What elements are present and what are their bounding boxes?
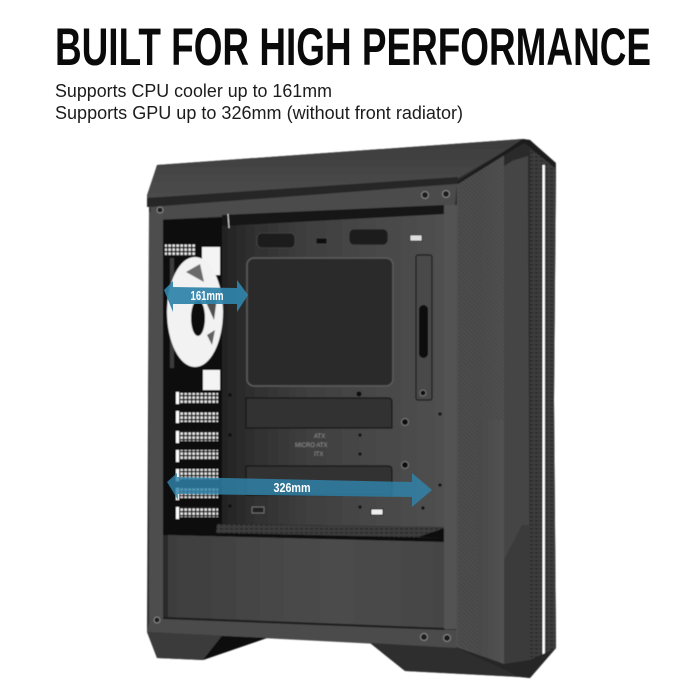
- front inner panel: [504, 156, 530, 665]
- white cable: [228, 214, 229, 228]
- top panel: [147, 139, 523, 198]
- PC case: [147, 139, 556, 678]
- case screws: [154, 190, 450, 642]
- label 326mm: 326mm: [274, 480, 310, 495]
- top frame rail: [150, 184, 457, 220]
- tray labels: ATX: [314, 434, 325, 440]
- label 161mm: 161mm: [190, 288, 224, 303]
- case silhouette: [147, 139, 556, 678]
- arrow: 161mm CPU cooler clearance: [164, 280, 248, 312]
- tray holes: [228, 392, 442, 510]
- interior back: [163, 208, 445, 542]
- motherboard cut-out: [247, 258, 393, 386]
- front panel: [456, 153, 504, 664]
- tray labels: MICRO ATX: [295, 443, 328, 449]
- right frame column: [444, 205, 458, 629]
- bottom vent: [216, 524, 445, 538]
- motherboard tray: [222, 208, 445, 527]
- lower tray cut-outs: [246, 398, 392, 428]
- specification text: [55, 81, 463, 123]
- left frame: [149, 212, 163, 632]
- top grommets: [257, 229, 422, 248]
- bottom front corner: [456, 647, 556, 678]
- front panel carbon texture: [458, 172, 478, 652]
- standoffs: [402, 390, 426, 468]
- GPU spec: Supports GPU up to 326mm (without front radiator): [55, 103, 463, 123]
- CPU cooler spec: Supports CPU cooler up to 161mm: [55, 81, 332, 101]
- tray labels: [295, 434, 328, 458]
- bottom frame rail: [147, 617, 458, 648]
- rear fan: [165, 244, 223, 390]
- tray labels: ITX: [314, 452, 323, 458]
- LED strip: [542, 165, 545, 656]
- top corner cap: [457, 139, 556, 184]
- arrow: 326mm GPU clearance: [167, 473, 432, 507]
- small connectors: [252, 507, 264, 513]
- PCI slots: [176, 392, 218, 519]
- feet: [147, 632, 222, 660]
- PSU shroud: [168, 535, 445, 628]
- front mesh strip: [530, 150, 556, 672]
- cable cut-out: [416, 255, 432, 400]
